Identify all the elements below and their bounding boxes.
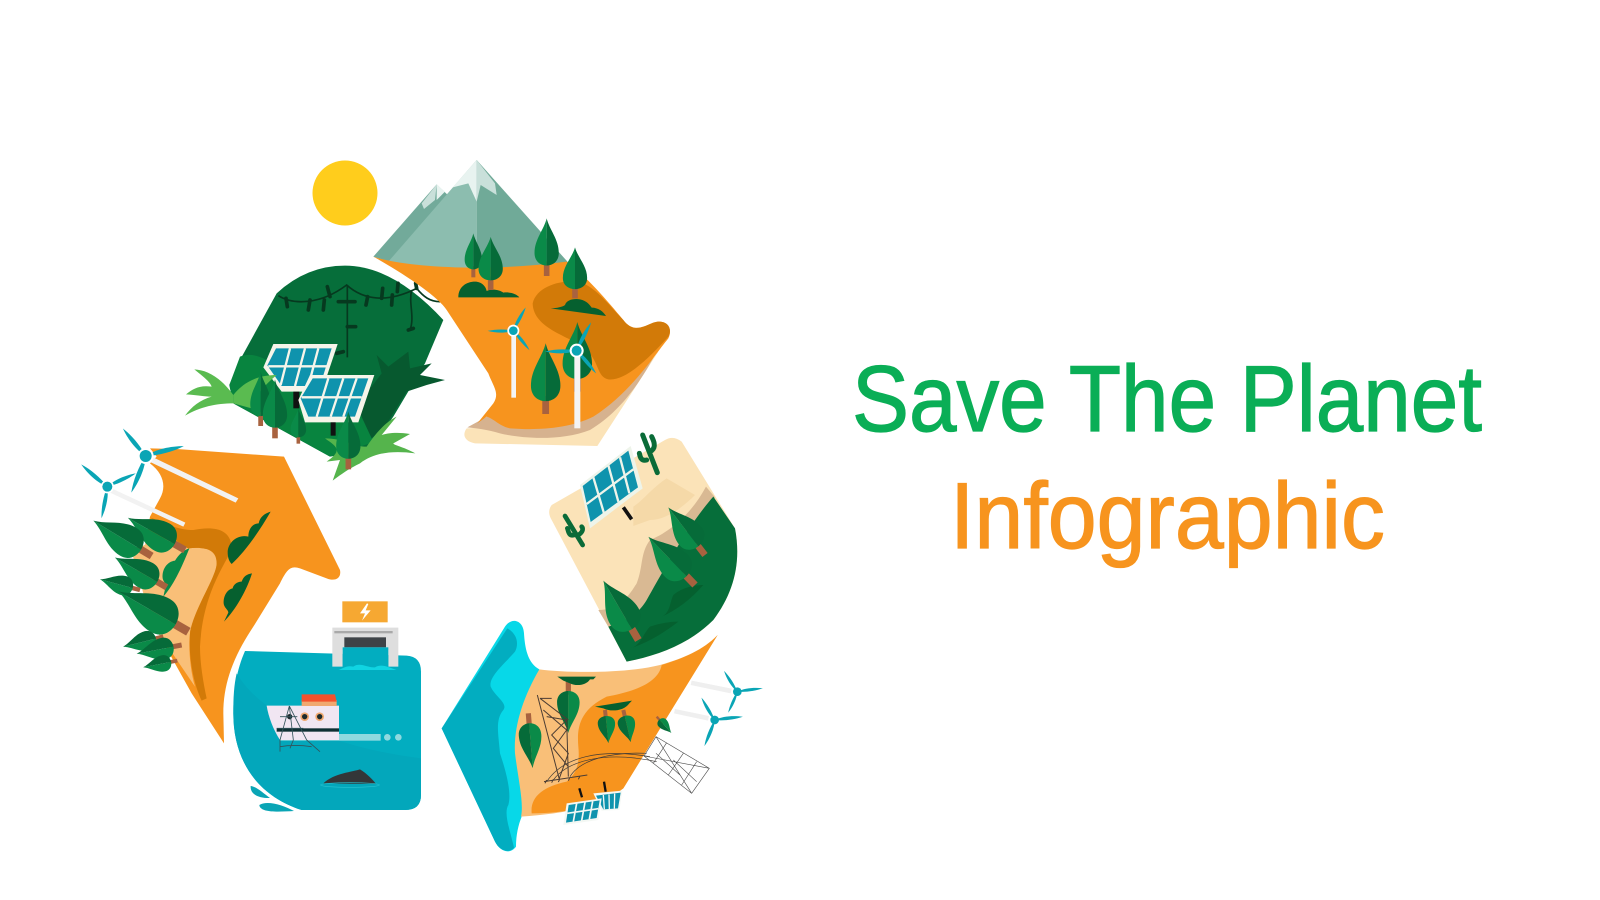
- snow caps: [422, 160, 497, 209]
- tan hillside: [132, 537, 217, 687]
- small solar panels: [563, 782, 622, 825]
- cactus left: [565, 516, 583, 545]
- panel: mountain and orange land with wind turbines: [373, 160, 670, 446]
- orange land: [373, 257, 670, 429]
- wind turbine upper: [120, 428, 238, 503]
- trees: [250, 372, 360, 469]
- cactus top: [639, 435, 657, 473]
- panel: desert with solar panel and forest: [549, 435, 737, 662]
- mountain right face: [477, 160, 568, 273]
- bushes: [458, 282, 606, 316]
- mountain back ridge: [373, 184, 460, 270]
- darker water shade: [233, 673, 421, 810]
- panel: blue arrow with land, pylons and solar: [442, 621, 763, 851]
- pylon standing: [537, 695, 587, 783]
- plant right: [325, 417, 415, 481]
- orange land: [532, 635, 718, 813]
- deep water: [442, 628, 517, 851]
- cream sand: [464, 352, 658, 446]
- dark orange hillside: [533, 281, 670, 379]
- solar panel right: [298, 375, 374, 436]
- water splashes: [251, 786, 294, 812]
- trees: [589, 499, 716, 648]
- water body: [233, 651, 421, 810]
- bushes: [163, 512, 271, 622]
- panel: green forest with solar panels: [185, 266, 445, 481]
- cream desert: [549, 438, 737, 662]
- trees: [85, 504, 198, 675]
- subtitle: Infographic: Infographic: [950, 463, 1385, 568]
- icon: sun: [312, 160, 378, 226]
- panel: orange arrow with trees and turbines: [79, 428, 340, 743]
- energy sign with lightning bolt: [342, 601, 388, 622]
- vines: [278, 283, 440, 357]
- wind turbine small: [488, 306, 531, 398]
- wind turbine lower: [79, 464, 185, 527]
- bushes on slope: [630, 585, 703, 648]
- rock in water: [321, 769, 379, 787]
- tan sand band: [467, 352, 657, 438]
- panel: teal water with ship and dam: [233, 601, 421, 812]
- solar panel left: [263, 344, 338, 408]
- pylon tilted: [644, 737, 709, 793]
- power lines: [547, 753, 657, 782]
- tan slope: [598, 487, 715, 627]
- dam: [332, 628, 398, 670]
- desert dune: [633, 478, 695, 526]
- lighter forest floor: [229, 355, 380, 457]
- green slope: [608, 497, 737, 662]
- green hill: [229, 266, 443, 457]
- wind turbine upper: [691, 670, 763, 714]
- cyan shoreline: [442, 621, 539, 851]
- tan land: [515, 635, 718, 817]
- wind turbine lower: [674, 697, 743, 747]
- trees: [465, 218, 592, 414]
- plant left: [185, 369, 277, 416]
- wind turbine large: [545, 321, 599, 428]
- mountain left face: [388, 160, 477, 273]
- dark orange ridge: [150, 517, 232, 701]
- orange arrow body: [140, 448, 340, 743]
- title: Save The Planet: Save The Planet: [852, 346, 1482, 451]
- palm silhouette: [352, 352, 445, 438]
- trees and bushes: [517, 677, 675, 769]
- solar panel: [580, 446, 643, 528]
- ship: [267, 694, 402, 752]
